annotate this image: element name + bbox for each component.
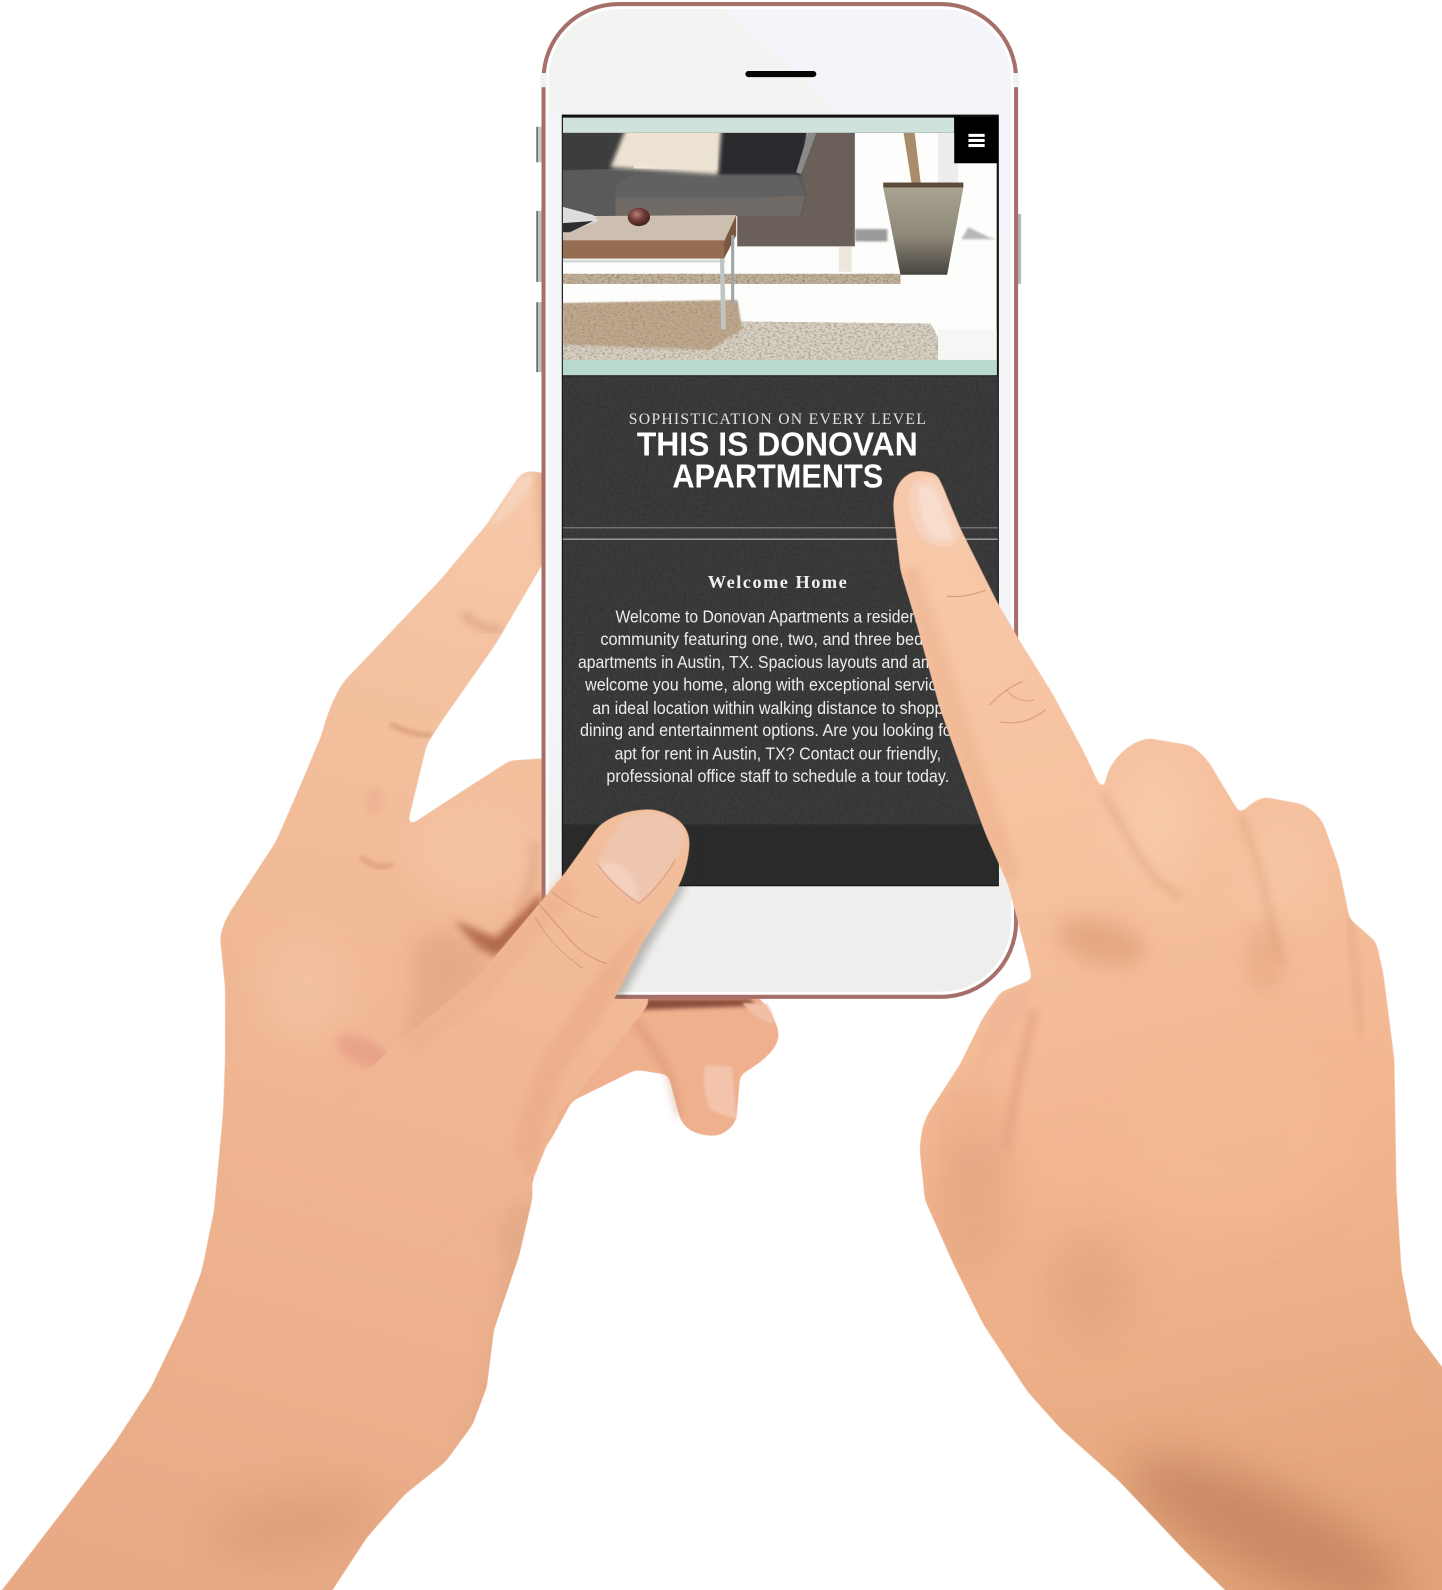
finger left edge shade (900, 568, 1019, 884)
left hand palm, index and middle finger (0, 471, 649, 1590)
website photo: living room (563, 122, 997, 375)
phone body (542, 2, 1018, 999)
body paragraph: professional office staff to schedule a tour today. (606, 766, 949, 786)
knuckles (1056, 913, 1146, 970)
potted plant (883, 133, 963, 275)
double rules (563, 527, 999, 540)
phone (536, 2, 1021, 999)
left hand fingers below the phone (532, 994, 779, 1180)
body paragraph: an ideal location within walking distance to shopping, (592, 698, 969, 718)
thumb nail (597, 813, 685, 904)
sofa (563, 122, 855, 272)
coffee table (563, 207, 736, 330)
top mint band (563, 118, 954, 133)
floor shadows and rug strip (563, 227, 997, 360)
back of hand shading (1122, 1444, 1408, 1590)
middle and ring finger highlights (1132, 787, 1181, 860)
finger folds (1103, 793, 1181, 897)
main heading (637, 426, 918, 496)
main heading: APARTMENTS (672, 459, 883, 496)
body paragraph: apt for rent in Austin, TX? Contact our friendly, (615, 744, 941, 764)
body paragraph: dining and entertainment options. Are you looking for an (580, 720, 980, 740)
index fingernail (909, 477, 960, 547)
side buttons (536, 127, 1021, 372)
eyebrow heading: SOPHISTICATION ON EVERY LEVEL (629, 411, 926, 428)
speaker (745, 71, 816, 77)
body paragraph (578, 607, 980, 786)
index fingernail (489, 475, 533, 527)
thumb creases (535, 892, 606, 968)
bottom mint band (563, 360, 997, 375)
body paragraph: apartments in Austin, TX. Spacious layouts and amenities (578, 652, 980, 672)
body paragraph: community featuring one, two, and three bedroom (600, 629, 960, 649)
finger shadow on phone (614, 886, 689, 999)
right hand (893, 471, 1442, 1590)
menu button (954, 116, 998, 163)
skin creases (947, 590, 1046, 723)
section heading: Welcome Home (708, 572, 847, 592)
antenna bands (540, 73, 1019, 87)
footer bar (563, 824, 999, 886)
main heading: THIS IS DONOVAN (637, 426, 918, 463)
body paragraph: Welcome to Donovan Apartments a residential (616, 607, 938, 627)
screen (562, 115, 999, 886)
left thumb (304, 809, 690, 1247)
body paragraph: welcome you home, along with exceptional service in (584, 675, 962, 695)
dark content panel (563, 376, 999, 825)
fingernails (704, 1003, 773, 1118)
